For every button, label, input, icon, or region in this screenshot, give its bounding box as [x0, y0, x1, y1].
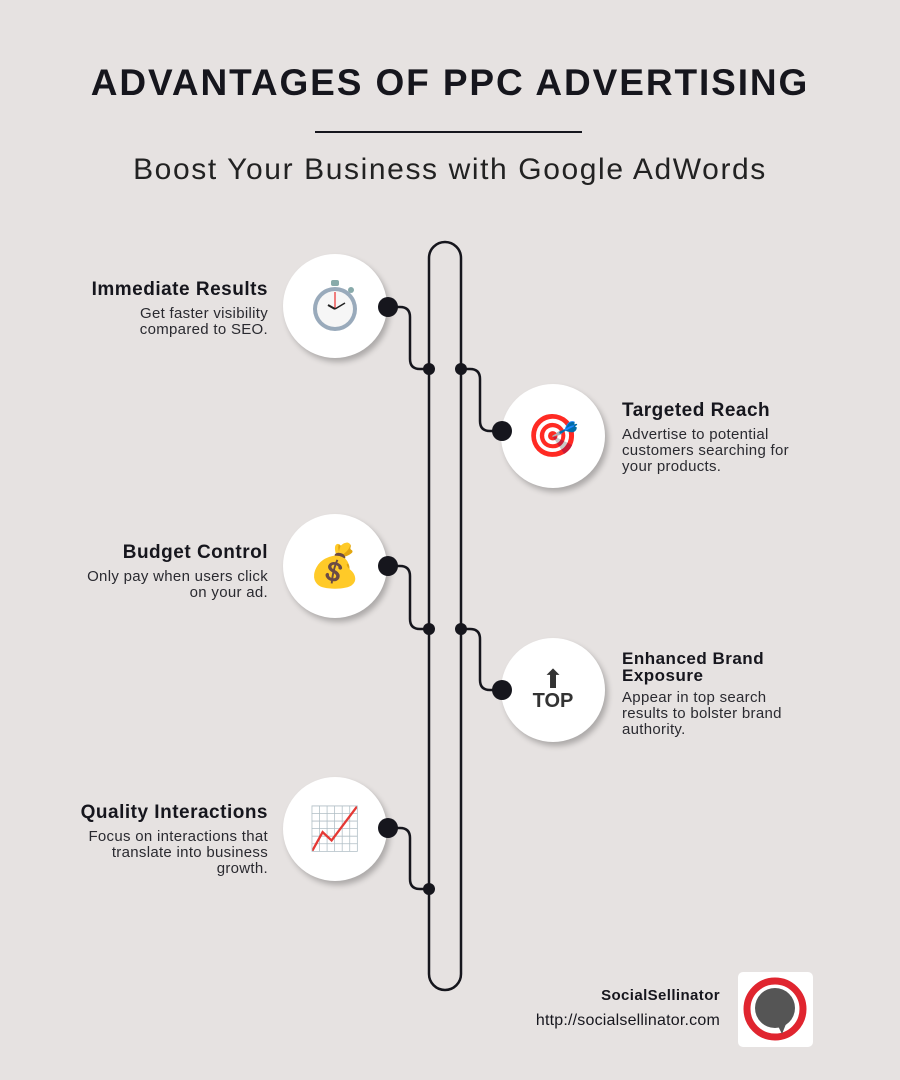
- circle icons: [283, 254, 387, 358]
- item: Targeted Reach: your products.: [622, 458, 721, 475]
- item: Targeted Reach: Targeted Reach: [622, 400, 770, 421]
- footer brand: [536, 987, 720, 1029]
- footer brand: http://socialsellinator.com: [536, 1012, 720, 1029]
- text: 🎯: [527, 411, 579, 460]
- item: Targeted Reach: Advertise to potential: [622, 426, 769, 443]
- item: Budget Control: Only pay when users click: [87, 568, 268, 585]
- item: Enhanced Brand Exposure: authority.: [622, 721, 686, 738]
- item: Immediate Results: Get faster visibility: [140, 305, 268, 322]
- item: Targeted Reach: customers searching for: [622, 442, 789, 459]
- item: Immediate Results: [92, 279, 268, 338]
- text: TOP: [533, 690, 573, 712]
- item: Budget Control: [87, 542, 268, 601]
- text: 📈: [309, 804, 361, 853]
- item: Targeted Reach: [622, 400, 789, 475]
- item: Budget Control: on your ad.: [190, 584, 268, 601]
- item: Quality Interactions: [81, 802, 268, 877]
- item: Budget Control: Budget Control: [123, 542, 268, 563]
- subtitle: Boost Your Business with Google AdWords: [133, 153, 767, 186]
- item: Enhanced Brand Exposure: Appear in top search: [622, 689, 766, 706]
- item: Quality Interactions: growth.: [217, 860, 268, 877]
- item: Enhanced Brand Exposure: Enhanced Brand: [622, 649, 764, 668]
- item: Enhanced Brand Exposure: [622, 649, 782, 738]
- item: Quality Interactions: translate into business: [112, 844, 268, 861]
- text: 💰: [309, 541, 361, 590]
- logo: [738, 972, 813, 1047]
- footer brand: SocialSellinator: [601, 987, 720, 1004]
- item: Immediate Results: compared to SEO.: [140, 321, 268, 338]
- item: Enhanced Brand Exposure: Exposure: [622, 666, 703, 685]
- item: Quality Interactions: Quality Interactions: [81, 802, 268, 823]
- item: Enhanced Brand Exposure: results to bolster brand: [622, 705, 782, 722]
- item: Quality Interactions: Focus on interactions that: [88, 828, 268, 845]
- title: ADVANTAGES OF PPC ADVERTISING: [91, 62, 809, 103]
- text: ⬆: [542, 664, 564, 694]
- item: Immediate Results: Immediate Results: [92, 279, 268, 300]
